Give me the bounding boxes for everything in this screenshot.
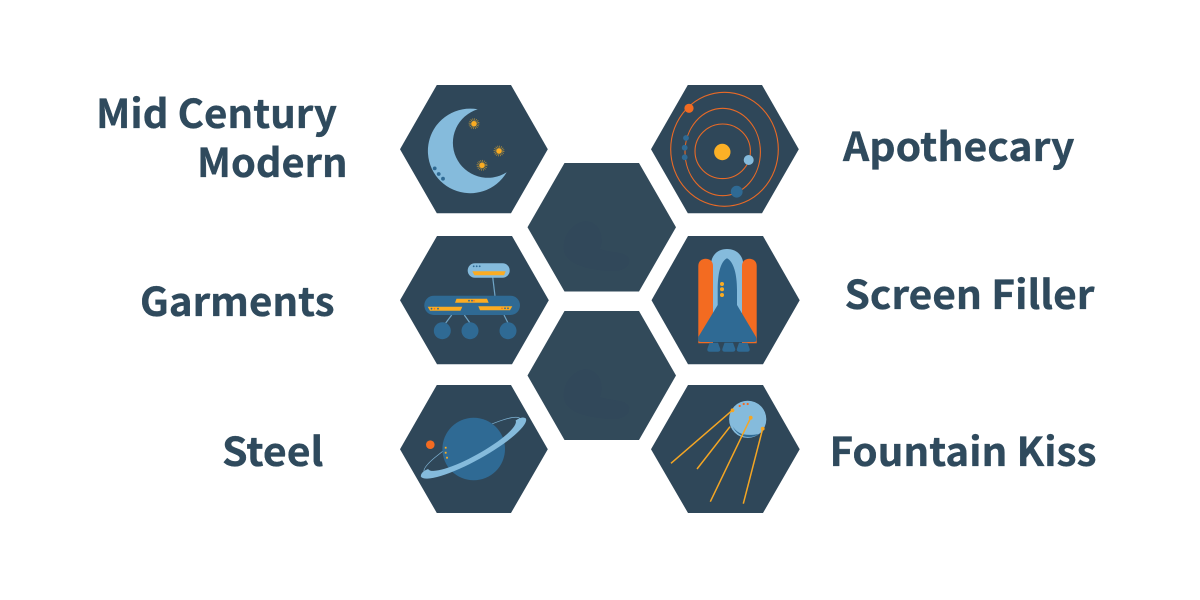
label: Mid Century Modern: Mid Century: [96, 83, 337, 140]
icon: satellite: [671, 401, 766, 504]
center hexagon bottom: [528, 311, 676, 440]
hexagon: solar system: [651, 85, 799, 213]
icon: stars: [470, 120, 503, 169]
label: Steel: Steel: [222, 421, 324, 478]
icon: moon craters: [433, 166, 445, 181]
icon: ringed planet: [419, 409, 532, 488]
label: Mid Century Modern: Modern: [197, 132, 348, 189]
icon: sun: [714, 144, 730, 160]
icon: rover: [424, 263, 520, 339]
icon: crescent moon: [428, 109, 507, 193]
hexagon: rover: [400, 236, 549, 364]
label: Mid Century Modern: [96, 83, 348, 189]
center hexagon top: [528, 163, 676, 292]
hexagon: shuttle: [652, 236, 800, 364]
icon: planets: [682, 104, 754, 198]
hexagon: saturn: [400, 385, 548, 513]
hexagon: moon: [400, 85, 548, 213]
label: Apothecary: Apothecary: [842, 116, 1075, 173]
label: Fountain Kiss: Fountain Kiss: [830, 421, 1096, 478]
label: Screen Filler: Screen Filler: [844, 264, 1095, 321]
hexagon: sputnik: [651, 385, 800, 513]
icon: orbits: [671, 92, 778, 206]
icon: space shuttle: [698, 249, 757, 352]
label: Garments: Garments: [140, 271, 334, 328]
